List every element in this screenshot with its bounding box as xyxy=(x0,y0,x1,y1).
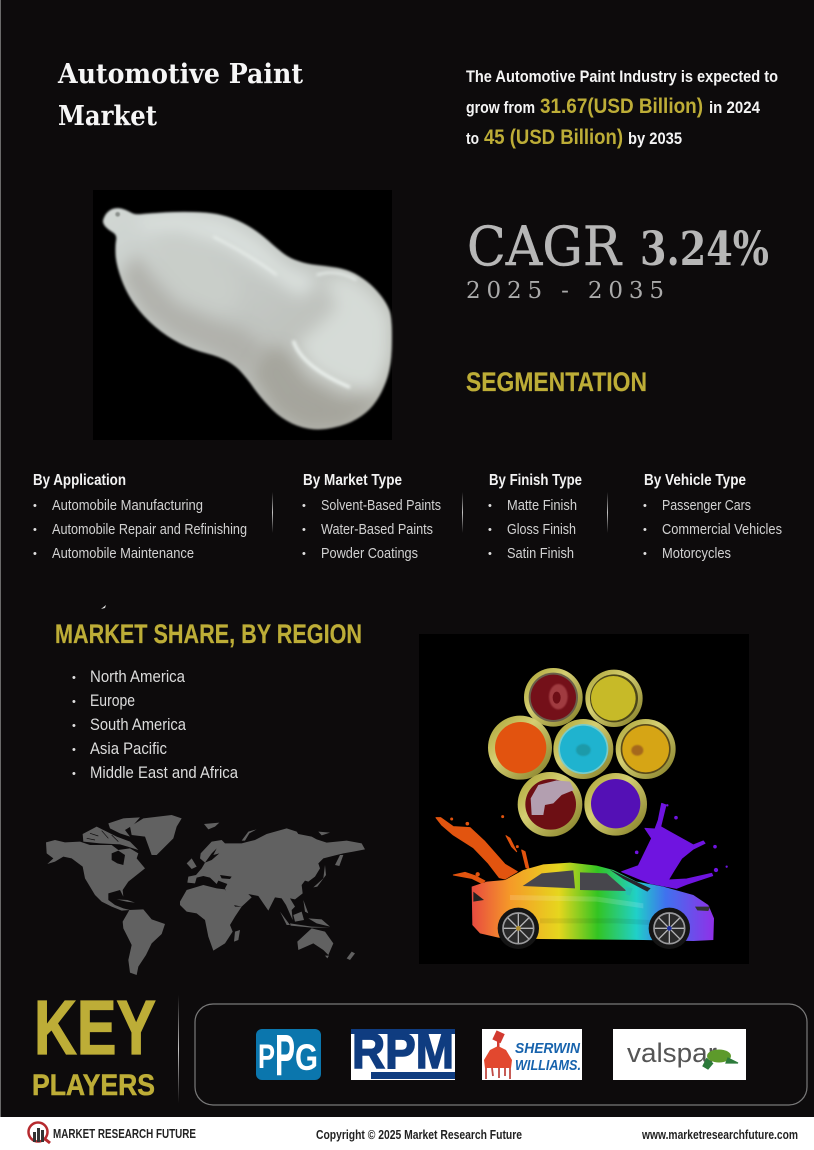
image: paint cans and rainbow car xyxy=(419,634,749,964)
segment: by vehicle type: • xyxy=(643,548,647,560)
segment: by finish type: By Finish Type xyxy=(489,472,582,489)
market forecast text: 31.67(USD Billion) xyxy=(540,95,703,118)
region list: North America xyxy=(90,668,186,686)
segment: by finish type: Satin Finish xyxy=(507,546,574,562)
logo: Valspar xyxy=(613,1029,746,1080)
segment: by market type: Water-Based Paints xyxy=(321,522,433,538)
orange paint splash xyxy=(436,816,529,883)
segment: by application: • xyxy=(33,524,37,536)
footer logo icon xyxy=(28,1122,50,1143)
segment: by finish type: • xyxy=(488,524,492,536)
logo: PPG xyxy=(256,1023,321,1088)
segmentation heading: SEGMENTATION xyxy=(466,367,647,397)
market forecast text: by 2035 xyxy=(628,130,682,148)
region list: • xyxy=(72,672,76,684)
region list: • xyxy=(72,768,76,780)
key players heading: KEY xyxy=(34,985,156,1071)
segment: by vehicle type: Motorcycles xyxy=(662,546,731,562)
footer bar: Copyright © 2025 Market Research Future xyxy=(316,1127,522,1142)
image: white paint speed shape xyxy=(93,190,397,440)
segment: by market type xyxy=(302,472,441,562)
market forecast text: to xyxy=(466,130,479,148)
segment: by vehicle type: Passenger Cars xyxy=(662,498,751,514)
key players heading xyxy=(32,985,156,1102)
segment: by vehicle type xyxy=(643,472,782,562)
paint cans xyxy=(488,668,676,837)
key players heading: PLAYERS xyxy=(32,1069,155,1102)
market forecast text xyxy=(466,68,778,149)
logo: Valspar: valspar xyxy=(627,1038,717,1068)
title xyxy=(57,58,303,132)
region list: South America xyxy=(90,716,187,734)
logo: Sherwin Williams: WILLIAMS. xyxy=(515,1057,581,1074)
CAGR block: 3.24% xyxy=(640,222,769,277)
market forecast text: 45 (USD Billion) xyxy=(484,126,623,149)
title: Market xyxy=(58,100,157,132)
segment: by application: Automobile Repair and Refinishing xyxy=(52,522,247,538)
front wheel xyxy=(649,908,690,949)
market share heading: MARKET SHARE, BY REGION xyxy=(55,619,362,649)
segment: by market type: • xyxy=(302,548,306,560)
segment: by finish type: Gloss Finish xyxy=(507,522,576,538)
region list xyxy=(72,668,239,782)
segment: by finish type xyxy=(488,472,582,562)
segment: by market type: • xyxy=(302,524,306,536)
segment: by market type: By Market Type xyxy=(303,472,402,489)
logo: PPG: G xyxy=(295,1037,318,1078)
region list: • xyxy=(72,720,76,732)
segment: by application: Automobile Maintenance xyxy=(52,546,194,562)
segment: by application: • xyxy=(33,548,37,560)
region list: Middle East and Africa xyxy=(90,764,239,782)
logo: Sherwin Williams: SHERWIN xyxy=(515,1040,581,1057)
market forecast text: in 2024 xyxy=(709,99,761,117)
region list: • xyxy=(72,696,76,708)
segment: by finish type: • xyxy=(488,500,492,512)
segment: by vehicle type: By Vehicle Type xyxy=(644,472,746,489)
segment: by application xyxy=(33,472,247,562)
segment: by finish type: Matte Finish xyxy=(507,498,577,514)
purple paint splash xyxy=(622,803,727,888)
rainbow car xyxy=(472,863,714,949)
segment: by application: • xyxy=(33,500,37,512)
segment: by application: Automobile Manufacturing xyxy=(52,498,203,514)
segment: by market type: Powder Coatings xyxy=(321,546,418,562)
footer bar: MARKET RESEARCH FUTURE xyxy=(53,1126,196,1141)
region list: Europe xyxy=(90,692,135,710)
world map xyxy=(46,815,365,975)
key players panel xyxy=(195,1004,807,1105)
segment: by vehicle type: • xyxy=(643,500,647,512)
market forecast text: The Automotive Paint Industry is expected to xyxy=(466,68,778,86)
logo: Sherwin Williams xyxy=(482,1029,582,1080)
CAGR block xyxy=(466,215,769,304)
region list: • xyxy=(72,744,76,756)
logo: PPG: P xyxy=(258,1038,275,1076)
segment: by vehicle type: • xyxy=(643,524,647,536)
title: Automotive Paint xyxy=(57,58,303,90)
logo: PPG: P xyxy=(275,1023,295,1088)
CAGR block: CAGR xyxy=(467,215,622,278)
segment: by vehicle type: Commercial Vehicles xyxy=(662,522,782,538)
market forecast text: grow from xyxy=(466,99,535,117)
segment: by market type: • xyxy=(302,500,306,512)
region list: Asia Pacific xyxy=(90,740,167,758)
segment: by application: By Application xyxy=(33,472,126,489)
rear wheel xyxy=(498,908,539,949)
footer bar xyxy=(0,1117,814,1150)
segment: by finish type: • xyxy=(488,548,492,560)
segment: by market type: Solvent-Based Paints xyxy=(321,498,441,514)
CAGR block: 2025 - 2035 xyxy=(466,278,664,304)
logo: RPM: RPM xyxy=(352,1023,454,1079)
